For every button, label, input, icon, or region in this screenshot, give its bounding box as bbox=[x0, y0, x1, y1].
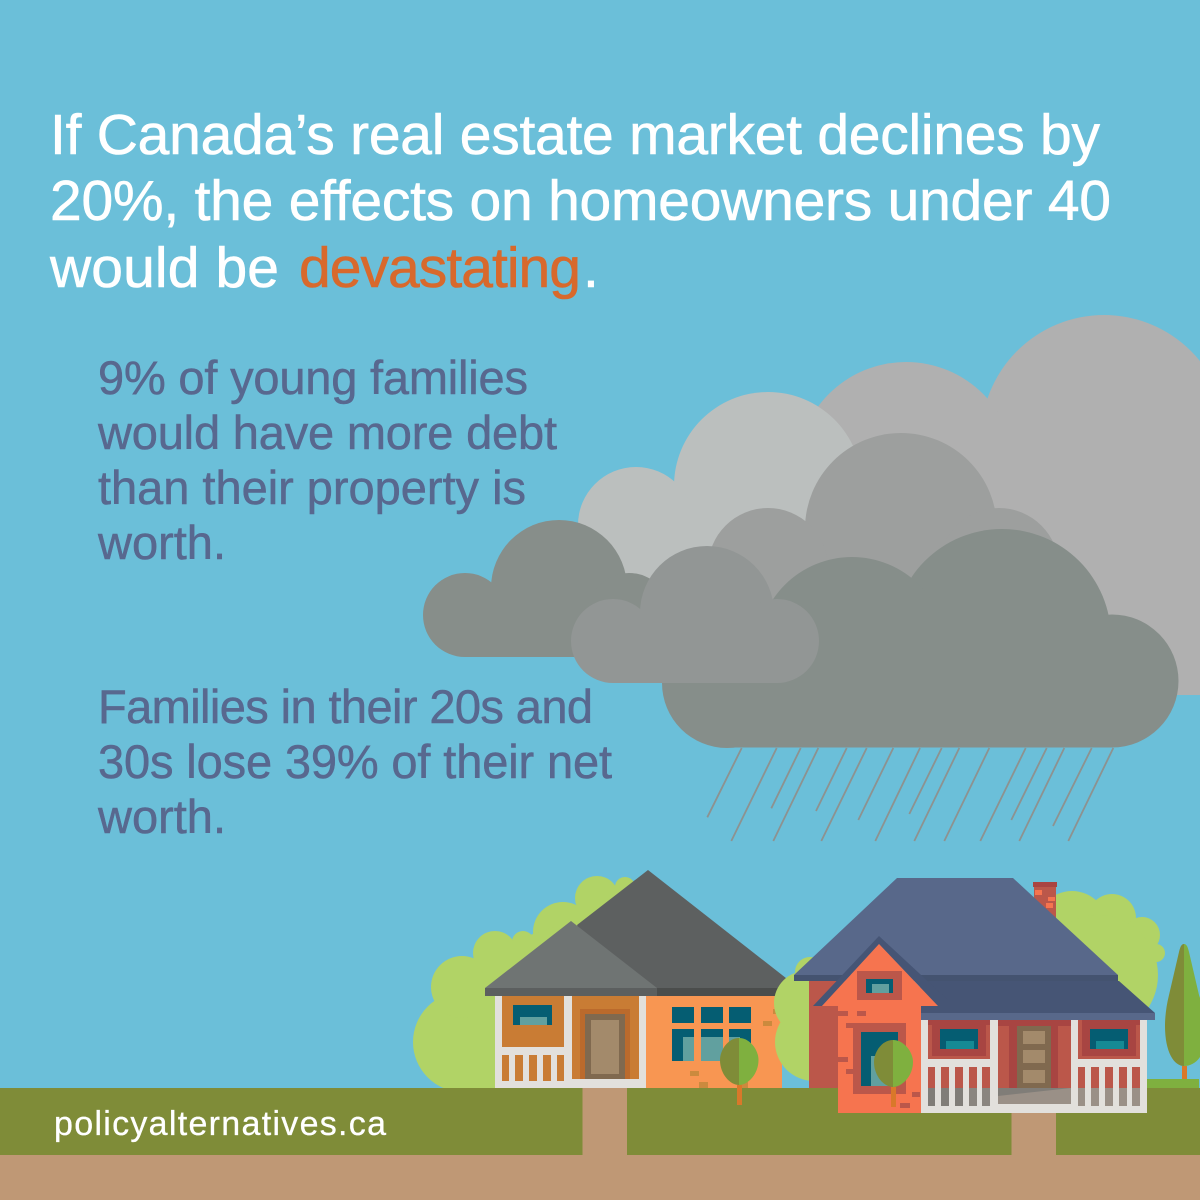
lawn strip at right bbox=[1147, 1079, 1199, 1091]
text block: net worth statistic: worth. bbox=[97, 790, 226, 843]
title bbox=[49, 103, 1111, 300]
cloud: small left bbox=[423, 520, 671, 657]
chimney bbox=[1033, 882, 1057, 921]
rain bbox=[707, 748, 1113, 841]
gable wall bbox=[822, 944, 938, 1113]
gable window bbox=[857, 971, 902, 1000]
text block: debt statistic: than their property is bbox=[98, 461, 526, 514]
title: would be bbox=[49, 236, 279, 300]
ground: road bbox=[0, 1155, 1200, 1200]
bricks bbox=[838, 1011, 920, 1108]
ground: lawn bbox=[0, 1088, 1200, 1155]
side wall bbox=[809, 981, 849, 1088]
house: right brick house bbox=[794, 878, 1155, 1113]
porch bbox=[921, 1020, 1147, 1113]
path: left house walkway bbox=[582, 1088, 627, 1156]
tree: cypress bbox=[1165, 944, 1200, 1080]
cloud: mid grey bbox=[708, 433, 1059, 628]
title: If Canada’s real estate market declines by bbox=[50, 103, 1100, 167]
cloud: back grey bbox=[797, 315, 1200, 695]
cloud: light grey bbox=[578, 392, 862, 640]
lawn under bushes between houses bbox=[770, 1088, 840, 1110]
cloud: large front bbox=[662, 529, 1178, 748]
front window bbox=[853, 1023, 906, 1094]
title: . bbox=[583, 236, 599, 300]
text block: debt statistic bbox=[97, 351, 557, 569]
upper roof bbox=[794, 878, 1118, 975]
cloud: small front bbox=[571, 546, 819, 683]
bushes between houses bbox=[774, 957, 853, 1081]
bushes behind right house bbox=[1036, 891, 1165, 1035]
text block: debt statistic: worth. bbox=[97, 516, 226, 569]
gable trim bbox=[813, 936, 948, 1006]
bushes behind left house bbox=[413, 876, 640, 1092]
tree: left round bbox=[720, 1038, 758, 1105]
title: 20%, the effects on homeowners under 40 bbox=[50, 169, 1111, 233]
lower roof bbox=[920, 981, 1155, 1013]
text block: net worth statistic: Families in their 20s and bbox=[98, 680, 593, 733]
website url: policyalternatives.ca bbox=[54, 1105, 386, 1143]
text block: net worth statistic bbox=[97, 680, 612, 843]
title: devastating bbox=[299, 236, 581, 300]
tree: front round bbox=[874, 1040, 913, 1107]
text block: debt statistic: 9% of young families bbox=[98, 351, 528, 404]
path: right house walkway bbox=[1012, 1110, 1056, 1156]
text block: debt statistic: would have more debt bbox=[97, 406, 557, 459]
text block: net worth statistic: 30s lose 39% of their net bbox=[98, 735, 612, 788]
house: left orange bungalow bbox=[485, 870, 791, 1088]
